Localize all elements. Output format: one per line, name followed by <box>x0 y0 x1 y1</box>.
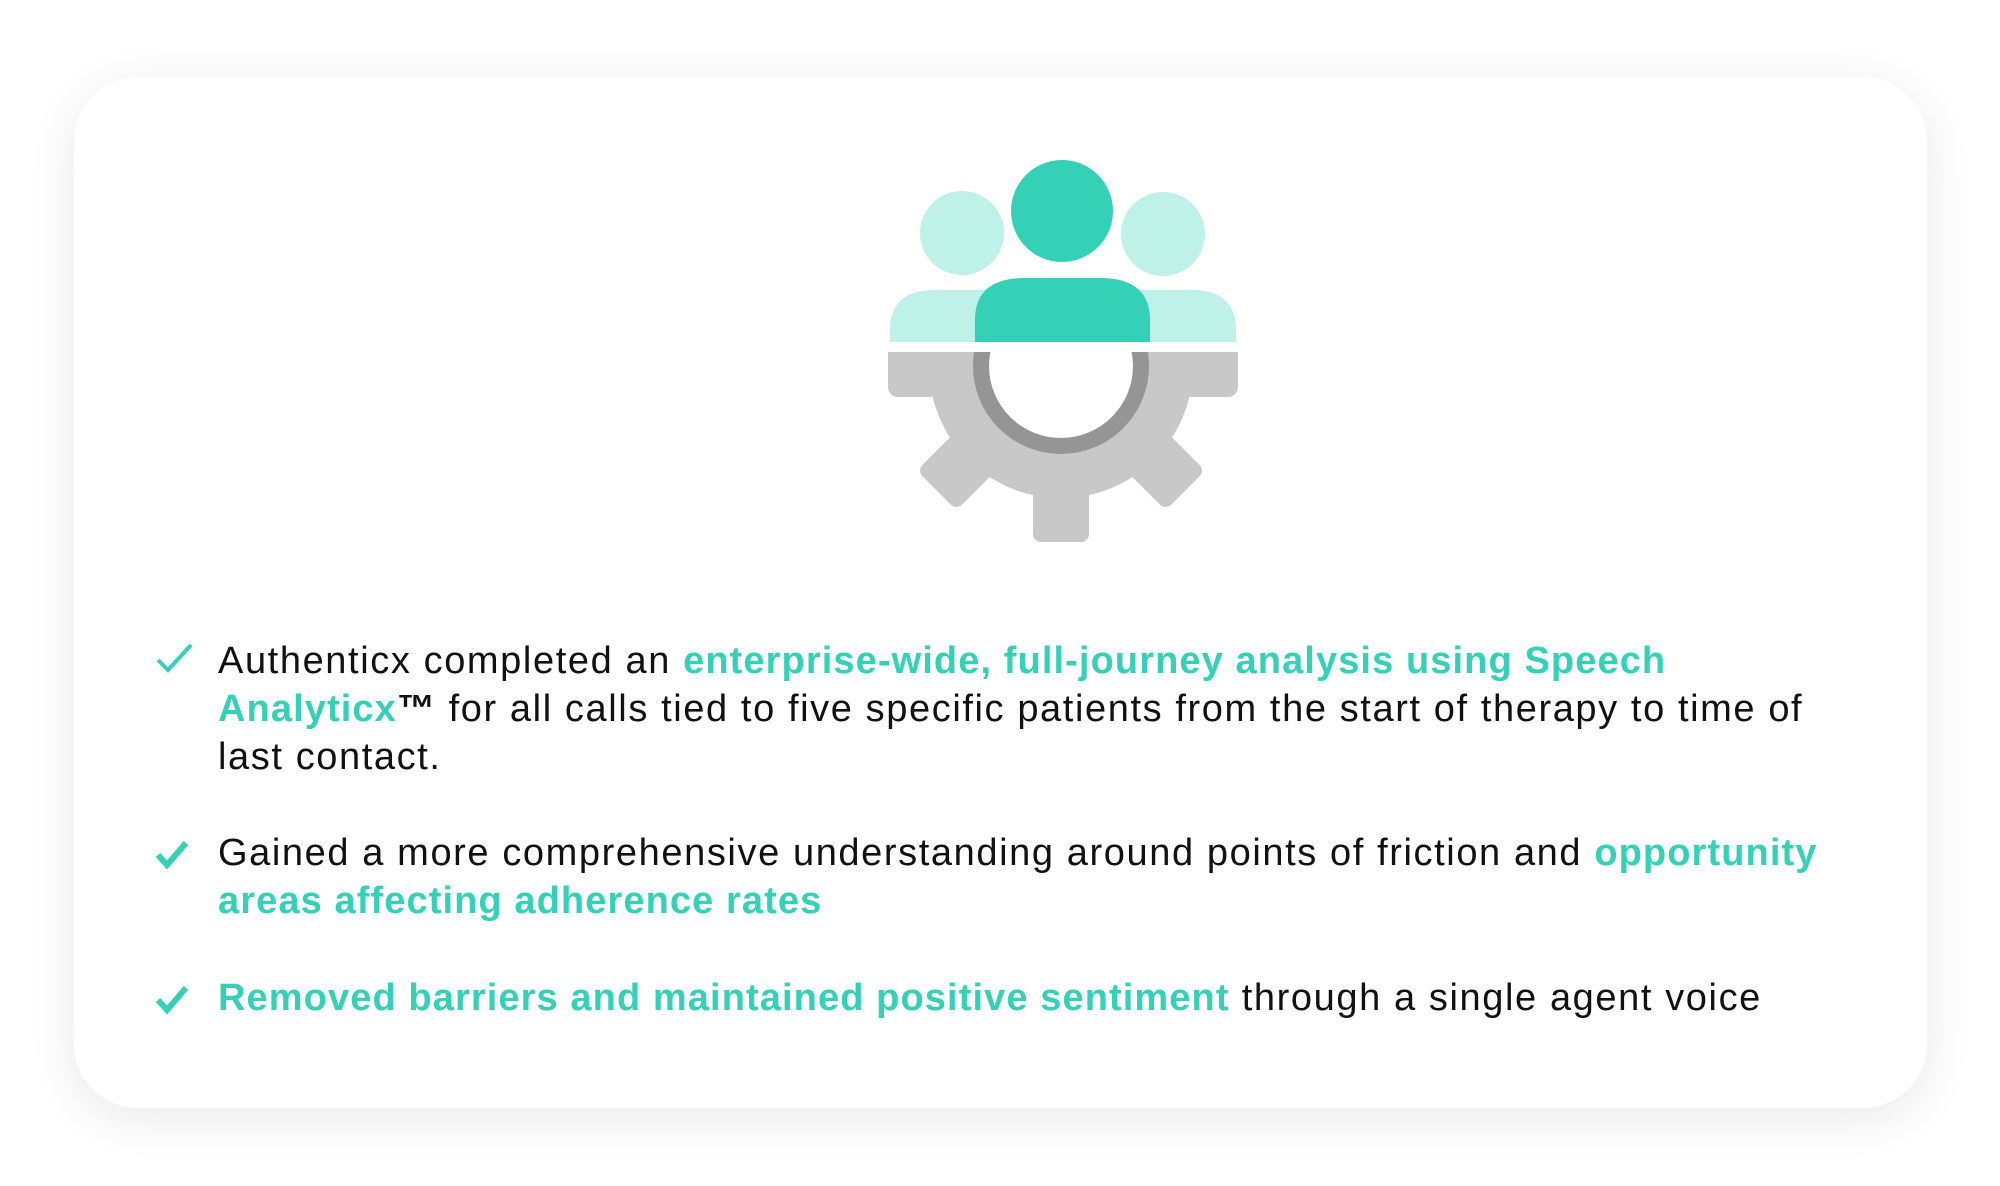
text block: bullet 1: Authenticx completed an enterprise-wide, full-journey analysis using Speech <box>218 640 1666 682</box>
icon: check 1 <box>156 644 192 673</box>
text block: bullet 1: Analyticx™ for all calls tied to five specific patients from the start of therapy to time of <box>218 688 1803 730</box>
icon: check 2 <box>156 841 188 870</box>
text block: bullet 2 <box>218 832 1817 922</box>
text block: bullet 1 <box>218 640 1803 778</box>
icon: check 3 <box>156 986 188 1014</box>
icon: team with gear <box>888 160 1238 542</box>
icon: people <box>890 160 1236 342</box>
icon: gear <box>888 352 1238 542</box>
text block: bullet 3: Removed barriers and maintained positive sentiment through a single agent voice <box>218 977 1762 1019</box>
text block: bullet 2: Gained a more comprehensive understanding around points of friction and opportunity <box>218 832 1817 874</box>
text block: bullet 1: last contact. <box>218 736 442 778</box>
text block: bullet 2: areas affecting adherence rates <box>218 880 822 922</box>
